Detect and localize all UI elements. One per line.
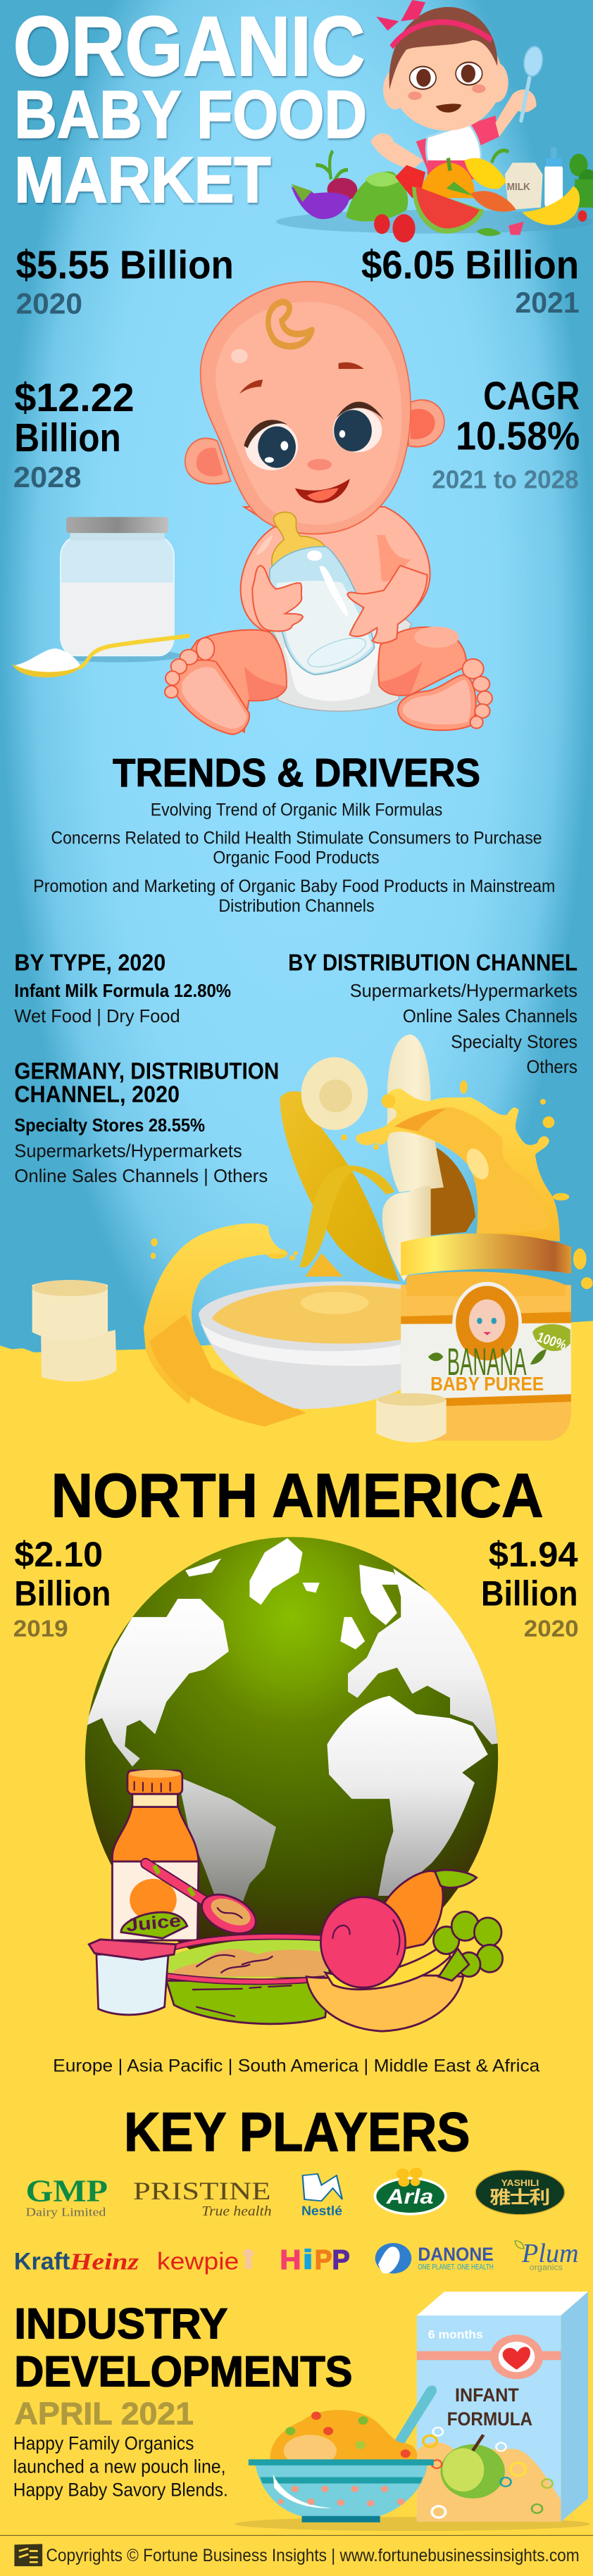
logo: Arla: Arla (386, 2185, 433, 2208)
text block: by distribution channel: Online Sales Channels (403, 1006, 578, 1026)
text block: germany distribution channel: CHANNEL, 2020 (14, 1081, 180, 1107)
date: April 2021: APRIL 2021 (14, 2396, 194, 2432)
background: blue upper area (0, 0, 593, 1436)
stat: 2020 value: 2020 (16, 287, 82, 320)
illustration: bowl of puree (199, 1281, 406, 1409)
stat: 2020: $1.94 (489, 1535, 578, 1574)
illustration: banana puree jar: BABY PUREE (430, 1374, 544, 1395)
logo: Nestle: Nestlé (301, 2204, 342, 2218)
text block: by type: Wet Food | Dry Food (14, 1006, 180, 1026)
stat: 2028 value: $12.22 (14, 375, 135, 420)
text block: by distribution channel (288, 950, 578, 1078)
heading: key players: KEY PLAYERS (124, 2101, 470, 2163)
background: yellow lower area (0, 1436, 593, 2576)
illustration: juice bottle: Juice (125, 1911, 182, 1936)
logo: Pristine: True health (201, 2204, 272, 2219)
text block: by type (14, 950, 231, 1026)
yellow ground (0, 1321, 593, 1447)
text block: germany distribution channel: Online Sales Channels | Others (14, 1166, 268, 1187)
text block: germany distribution channel: Supermarkets/Hypermarkets (14, 1141, 242, 1162)
heading: industry developments: DEVELOPMENTS (14, 2348, 352, 2396)
text block: germany distribution channel: Specialty Stores 28.55% (14, 1115, 205, 1136)
logo: Plum organics (515, 2239, 579, 2272)
illustration: infant formula box: 6 months (428, 2328, 483, 2341)
logo: Danone: ONE PLANET. ONE HEALTH (418, 2262, 494, 2271)
illustration: banana puree jar: 100% (536, 1328, 568, 1353)
logo: Plum organics: organics (530, 2262, 563, 2272)
stat: 2019: Billion (14, 1574, 111, 1614)
footer divider (0, 2534, 593, 2537)
illustration: infant formula box: INFANT (455, 2385, 519, 2406)
stat: 2019: 2019 (13, 1615, 68, 1642)
logo: Pristine (133, 2177, 272, 2219)
logo: HiPP: i (303, 2244, 313, 2275)
header panel (12, 0, 593, 734)
text block: by type: Infant Milk Formula 12.80% (14, 981, 231, 1002)
illustration: juice bottle (112, 1770, 199, 1940)
stat: 2020 value: $5.55 Billion (16, 243, 234, 287)
logo: KraftHeinz: Heinz (69, 2248, 139, 2275)
illustration: infant formula box (235, 2292, 590, 2531)
logo: Pristine: PRISTINE (133, 2177, 270, 2205)
logo: HiPP: P (332, 2244, 350, 2275)
illustration: banana slices (32, 1280, 116, 1381)
heading: north america: NORTH AMERICA (51, 1462, 544, 1531)
text block: germany distribution channel (14, 1058, 279, 1187)
stat: 2028 value: 2028 (13, 461, 81, 494)
stat: 2020 value (16, 243, 234, 320)
text block: drivers list: Organic Food Products (213, 848, 380, 867)
illustration: baby spoon (146, 1864, 261, 1941)
stat: 2019: $2.10 (14, 1535, 103, 1574)
text: other regions: Europe | Asia Pacific | South America | Middle East & Africa (53, 2056, 540, 2076)
illustration: bananas and splash (144, 1034, 593, 1426)
heading: trends and drivers: TRENDS & DRIVERS (113, 750, 480, 795)
logo: Yashili: YASHILI (501, 2178, 539, 2188)
stat: 2020: Billion (481, 1574, 578, 1614)
logo: Danone (375, 2243, 494, 2273)
text block: by distribution channel: BY DISTRIBUTION CHANNEL (288, 950, 578, 976)
logo: HiPP: H (280, 2244, 301, 2275)
stat: 2028 value (13, 375, 135, 494)
text block: development (13, 2433, 228, 2501)
logo: HiPP: P (315, 2244, 332, 2275)
text block: development: Happy Baby Savory Blends. (13, 2480, 228, 2501)
logo: HiPP (280, 2244, 350, 2275)
stat: CAGR: 10.58% (456, 414, 580, 458)
illustration: cereal bowl (166, 1937, 329, 2024)
trends and drivers panel (0, 750, 593, 1447)
title: BABY FOOD (14, 77, 367, 153)
text block: by type: BY TYPE, 2020 (14, 950, 166, 976)
text block: by distribution channel: Supermarkets/Hypermarkets (350, 981, 578, 1002)
stat: CAGR (432, 374, 580, 494)
stat: CAGR: CAGR (483, 374, 580, 418)
text block: drivers list (33, 800, 555, 915)
illustration: banana boat with fruit (306, 1870, 503, 2031)
text block: germany distribution channel: GERMANY, DISTRIBUTION (14, 1058, 279, 1084)
stat: 2021 value (361, 243, 580, 319)
text block: by distribution channel: Others (527, 1057, 578, 1078)
logo: Plum organics: Plum (521, 2239, 579, 2268)
logo: Danone: DANONE (418, 2244, 494, 2265)
heading: industry developments (14, 2300, 352, 2396)
logo: KraftHeinz (14, 2247, 139, 2275)
north america panel (13, 1462, 579, 2076)
illustration: yogurt cup (89, 1940, 176, 2015)
logo: Arla (374, 2168, 447, 2216)
text block: drivers list: Concerns Related to Child Health Stimulate Consumers to Purchase (51, 828, 542, 848)
stat: CAGR: 2021 to 2028 (432, 465, 579, 494)
text block: development: launched a new pouch line, (13, 2456, 226, 2477)
logo: Nestle (301, 2174, 342, 2218)
heading: industry developments: INDUSTRY (14, 2300, 227, 2348)
title (13, 0, 367, 216)
logo: Yashili (475, 2170, 565, 2215)
illustration: banana puree jar: BANANA (447, 1340, 527, 1383)
logo: KraftHeinz: Kraft (14, 2247, 70, 2275)
key players and developments panel (0, 2101, 593, 2566)
stat: 2019 (13, 1535, 111, 1642)
logo: Kewpie: kewpie (157, 2247, 239, 2275)
text block: drivers list: Distribution Channels (218, 896, 375, 915)
stat: 2021 value: 2021 (515, 287, 580, 319)
stat: 2021 value: $6.05 Billion (361, 243, 579, 287)
illustration: vegetables and fruits: MILK (507, 181, 530, 192)
stat: 2020 (481, 1535, 579, 1642)
icon: brand logo (14, 2544, 42, 2566)
text block: drivers list: Promotion and Marketing of Organic Baby Food Products in Mainstream (33, 876, 555, 896)
title: MARKET (14, 144, 270, 216)
stat: 2028 value: Billion (14, 415, 121, 460)
logo: GMP: Dairy Limited (26, 2206, 106, 2219)
illustration: baby with bottle (165, 282, 492, 734)
illustration: globe (85, 1537, 507, 1978)
illustration: toddler with spoon (370, 0, 545, 180)
illustration: jar of milk powder and spoon (12, 517, 188, 677)
text block: by distribution channel: Specialty Stores (451, 1032, 578, 1053)
text block: drivers list: Evolving Trend of Organic Milk Formulas (151, 800, 442, 819)
illustration: cereal bowl and spoon (249, 2385, 437, 2522)
illustration: vegetables and fruits (276, 147, 593, 242)
stat: 2020: 2020 (524, 1615, 579, 1642)
illustration: infant formula box: FORMULA (447, 2408, 532, 2430)
title: ORGANIC (13, 0, 365, 94)
logo: GMP: GMP (26, 2173, 108, 2208)
logo: Yashili: 雅士利 (489, 2184, 550, 2209)
text block: development: Happy Family Organics (13, 2433, 194, 2454)
illustration: banana puree jar (376, 1233, 571, 1443)
